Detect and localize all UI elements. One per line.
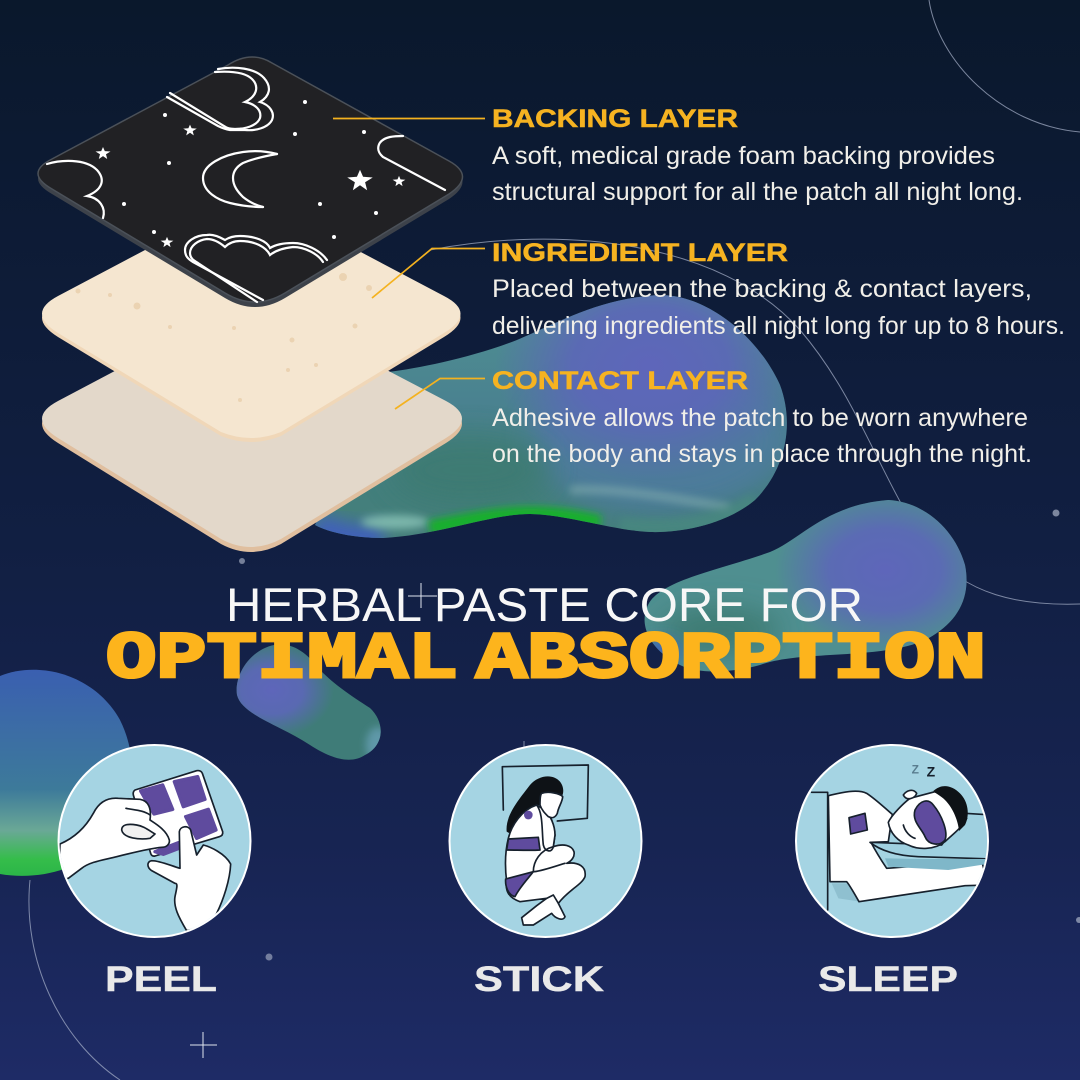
backing layer text: BACKING LAYER	[492, 105, 738, 133]
contact layer text: on the body and stays in place through the night.	[492, 440, 1032, 468]
zz: Z	[912, 762, 919, 776]
step labels: SLEEP	[818, 960, 958, 999]
moon and cloud line art	[47, 68, 445, 302]
icon: stick	[450, 745, 642, 937]
step labels: PEEL	[105, 960, 217, 999]
small gradient blob	[236, 645, 381, 760]
contact layer text: Adhesive allows the patch to be worn anywhere	[492, 404, 1028, 432]
plus marks	[190, 583, 437, 1058]
contact layer patch	[42, 299, 462, 552]
backing layer patch	[38, 57, 462, 307]
leader lines	[333, 118, 485, 409]
ingredient layer text: Placed between the backing & contact layers,	[492, 275, 1032, 303]
step labels	[105, 960, 958, 999]
contact layer text	[492, 367, 1032, 468]
zz	[912, 765, 935, 776]
right gradient blob	[644, 500, 967, 672]
title: OPTIMAL	[106, 622, 458, 697]
stars	[96, 125, 405, 247]
title: HERBAL PASTE CORE FOR	[226, 578, 863, 631]
title: ABSORPTION	[476, 622, 986, 697]
icon: sleep	[796, 745, 992, 937]
title	[106, 578, 986, 697]
dots	[122, 100, 378, 239]
ingredient layer text: INGREDIENT LAYER	[492, 239, 788, 267]
icon: peel	[58, 745, 251, 937]
ingredient layer text: delivering ingredients all night long for up to 8 hours.	[492, 312, 1065, 340]
ingredient layer patch	[42, 194, 460, 442]
left gradient blob	[0, 670, 132, 876]
zz: Z	[927, 764, 936, 780]
backing layer text	[492, 105, 1023, 206]
backing layer text: A soft, medical grade foam backing provides	[492, 142, 995, 170]
contact layer text: CONTACT LAYER	[492, 367, 748, 395]
ingredient layer text	[492, 239, 1065, 340]
large gradient blob	[315, 295, 787, 538]
step labels: STICK	[474, 960, 604, 999]
backing layer text: structural support for all the patch all night long.	[492, 178, 1023, 206]
